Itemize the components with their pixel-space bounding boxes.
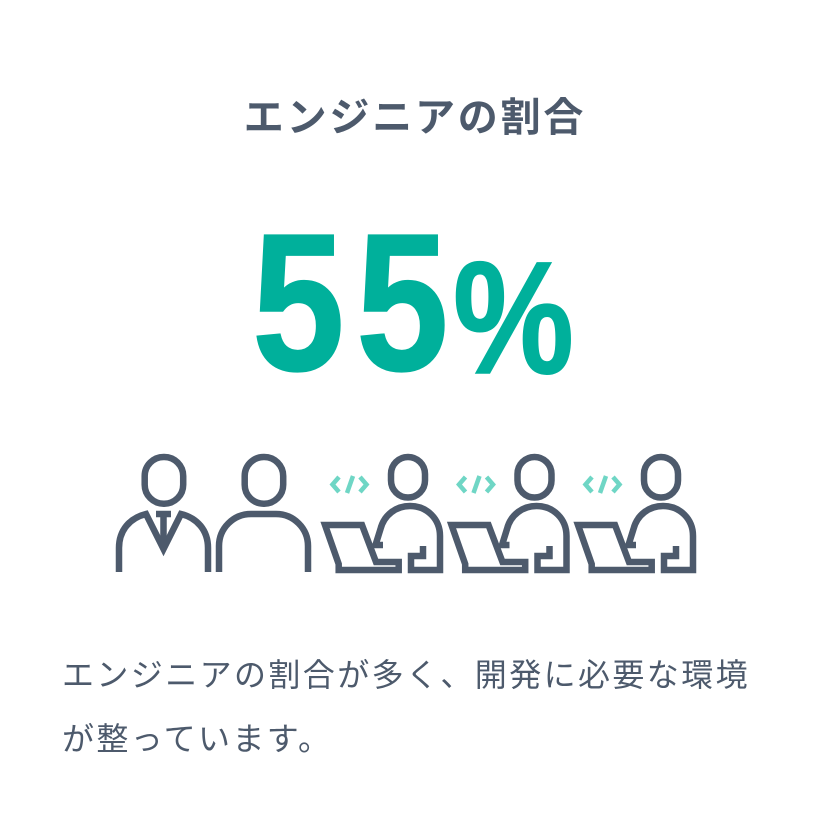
big percentage: 55%: % — [453, 230, 574, 407]
description text: が整っています。 — [62, 721, 332, 757]
description text: エンジニアの割合が多く、開発に必要な環境 — [62, 657, 750, 693]
icon: engineer at laptop 2 — [452, 457, 566, 570]
icon: engineer at laptop 1 — [325, 457, 440, 570]
icon: engineer at laptop 3 — [578, 457, 693, 570]
big percentage: 55%: 5 — [356, 192, 449, 412]
title: エンジニアの割合 — [244, 96, 586, 140]
big percentage: 55%: 5 — [252, 192, 345, 412]
description text — [62, 657, 750, 757]
icon: manager in suit and tie — [119, 457, 208, 572]
icon: person — [219, 457, 308, 572]
